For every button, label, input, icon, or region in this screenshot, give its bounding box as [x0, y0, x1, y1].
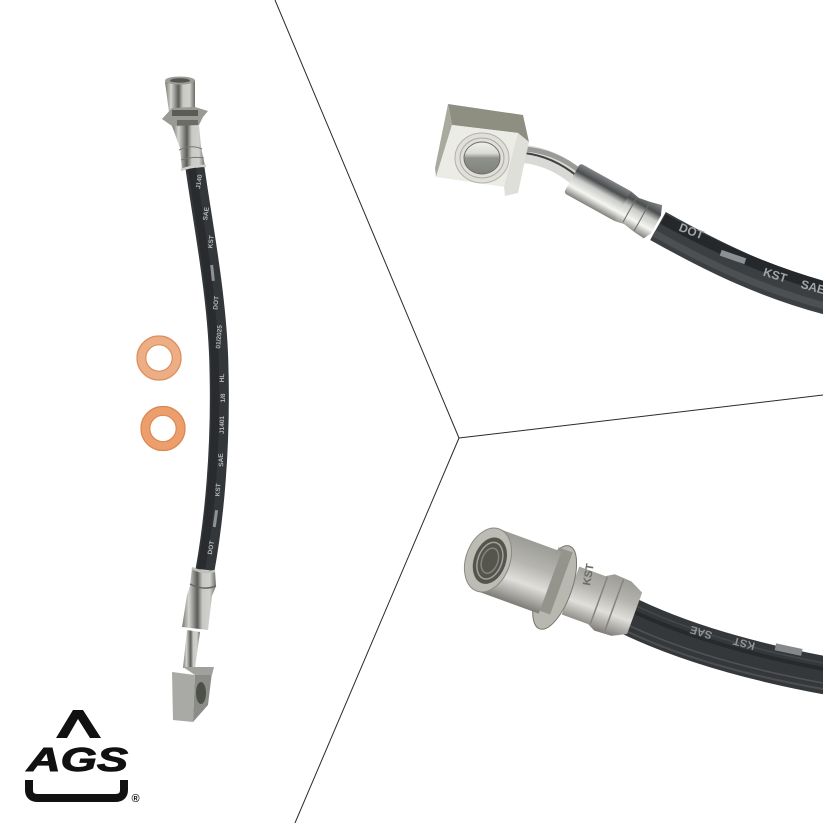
hose lettering: KST — [732, 634, 756, 652]
hose printed markings: J140 — [195, 174, 204, 189]
hose printed markings: DOT — [212, 296, 221, 310]
copper washer lower — [141, 406, 185, 450]
panel dividers — [275, 0, 823, 823]
hose printed markings: 1/8 — [220, 393, 227, 403]
logo base bracket — [29, 780, 124, 798]
cylinder — [477, 529, 561, 614]
threaded bore — [467, 533, 513, 589]
hose marking bar — [720, 250, 746, 264]
hose marking bars — [210, 265, 218, 527]
hose printed markings: DOT — [207, 540, 216, 555]
hose printed markings: KST — [215, 483, 222, 497]
front face — [456, 521, 520, 599]
hose printed markings — [195, 174, 227, 555]
hose lettering: SAE — [689, 623, 714, 641]
registered mark: ® — [132, 793, 140, 805]
crimp collar — [560, 562, 645, 642]
hose lettering — [677, 220, 823, 297]
top fitting — [162, 76, 208, 170]
hose lettering: DOT — [677, 220, 706, 243]
bottom fitting — [172, 568, 216, 722]
hose lettering: KST — [762, 265, 789, 286]
hose printed markings: J1401 — [219, 416, 226, 434]
curved tube — [524, 149, 581, 178]
hose printed markings: HL — [219, 373, 226, 382]
copper washer upper — [137, 336, 181, 380]
metal fitting — [451, 514, 649, 658]
hose close up — [654, 219, 823, 310]
detail: lower right banjo fitting — [451, 514, 823, 692]
hose body — [192, 168, 219, 570]
flange washer — [524, 540, 586, 635]
square block — [435, 104, 529, 196]
hose printed markings: KST — [207, 235, 216, 249]
hose printed markings: SAE — [202, 206, 211, 221]
full brake hose assembly — [162, 76, 227, 722]
logo wordmark: AGS — [26, 741, 128, 778]
logo chevron — [56, 710, 101, 738]
crimped sleeve — [563, 161, 666, 240]
hose printed markings: SAE — [218, 453, 225, 467]
fitting lettering: KST — [581, 562, 597, 587]
AGS logo — [26, 710, 140, 805]
hose printed markings: 01/2025 — [215, 325, 224, 349]
hose lettering — [689, 623, 756, 652]
hose marking bar — [775, 643, 803, 656]
ribbed hose close up — [626, 606, 823, 692]
detail: upper right block fitting — [435, 104, 823, 310]
